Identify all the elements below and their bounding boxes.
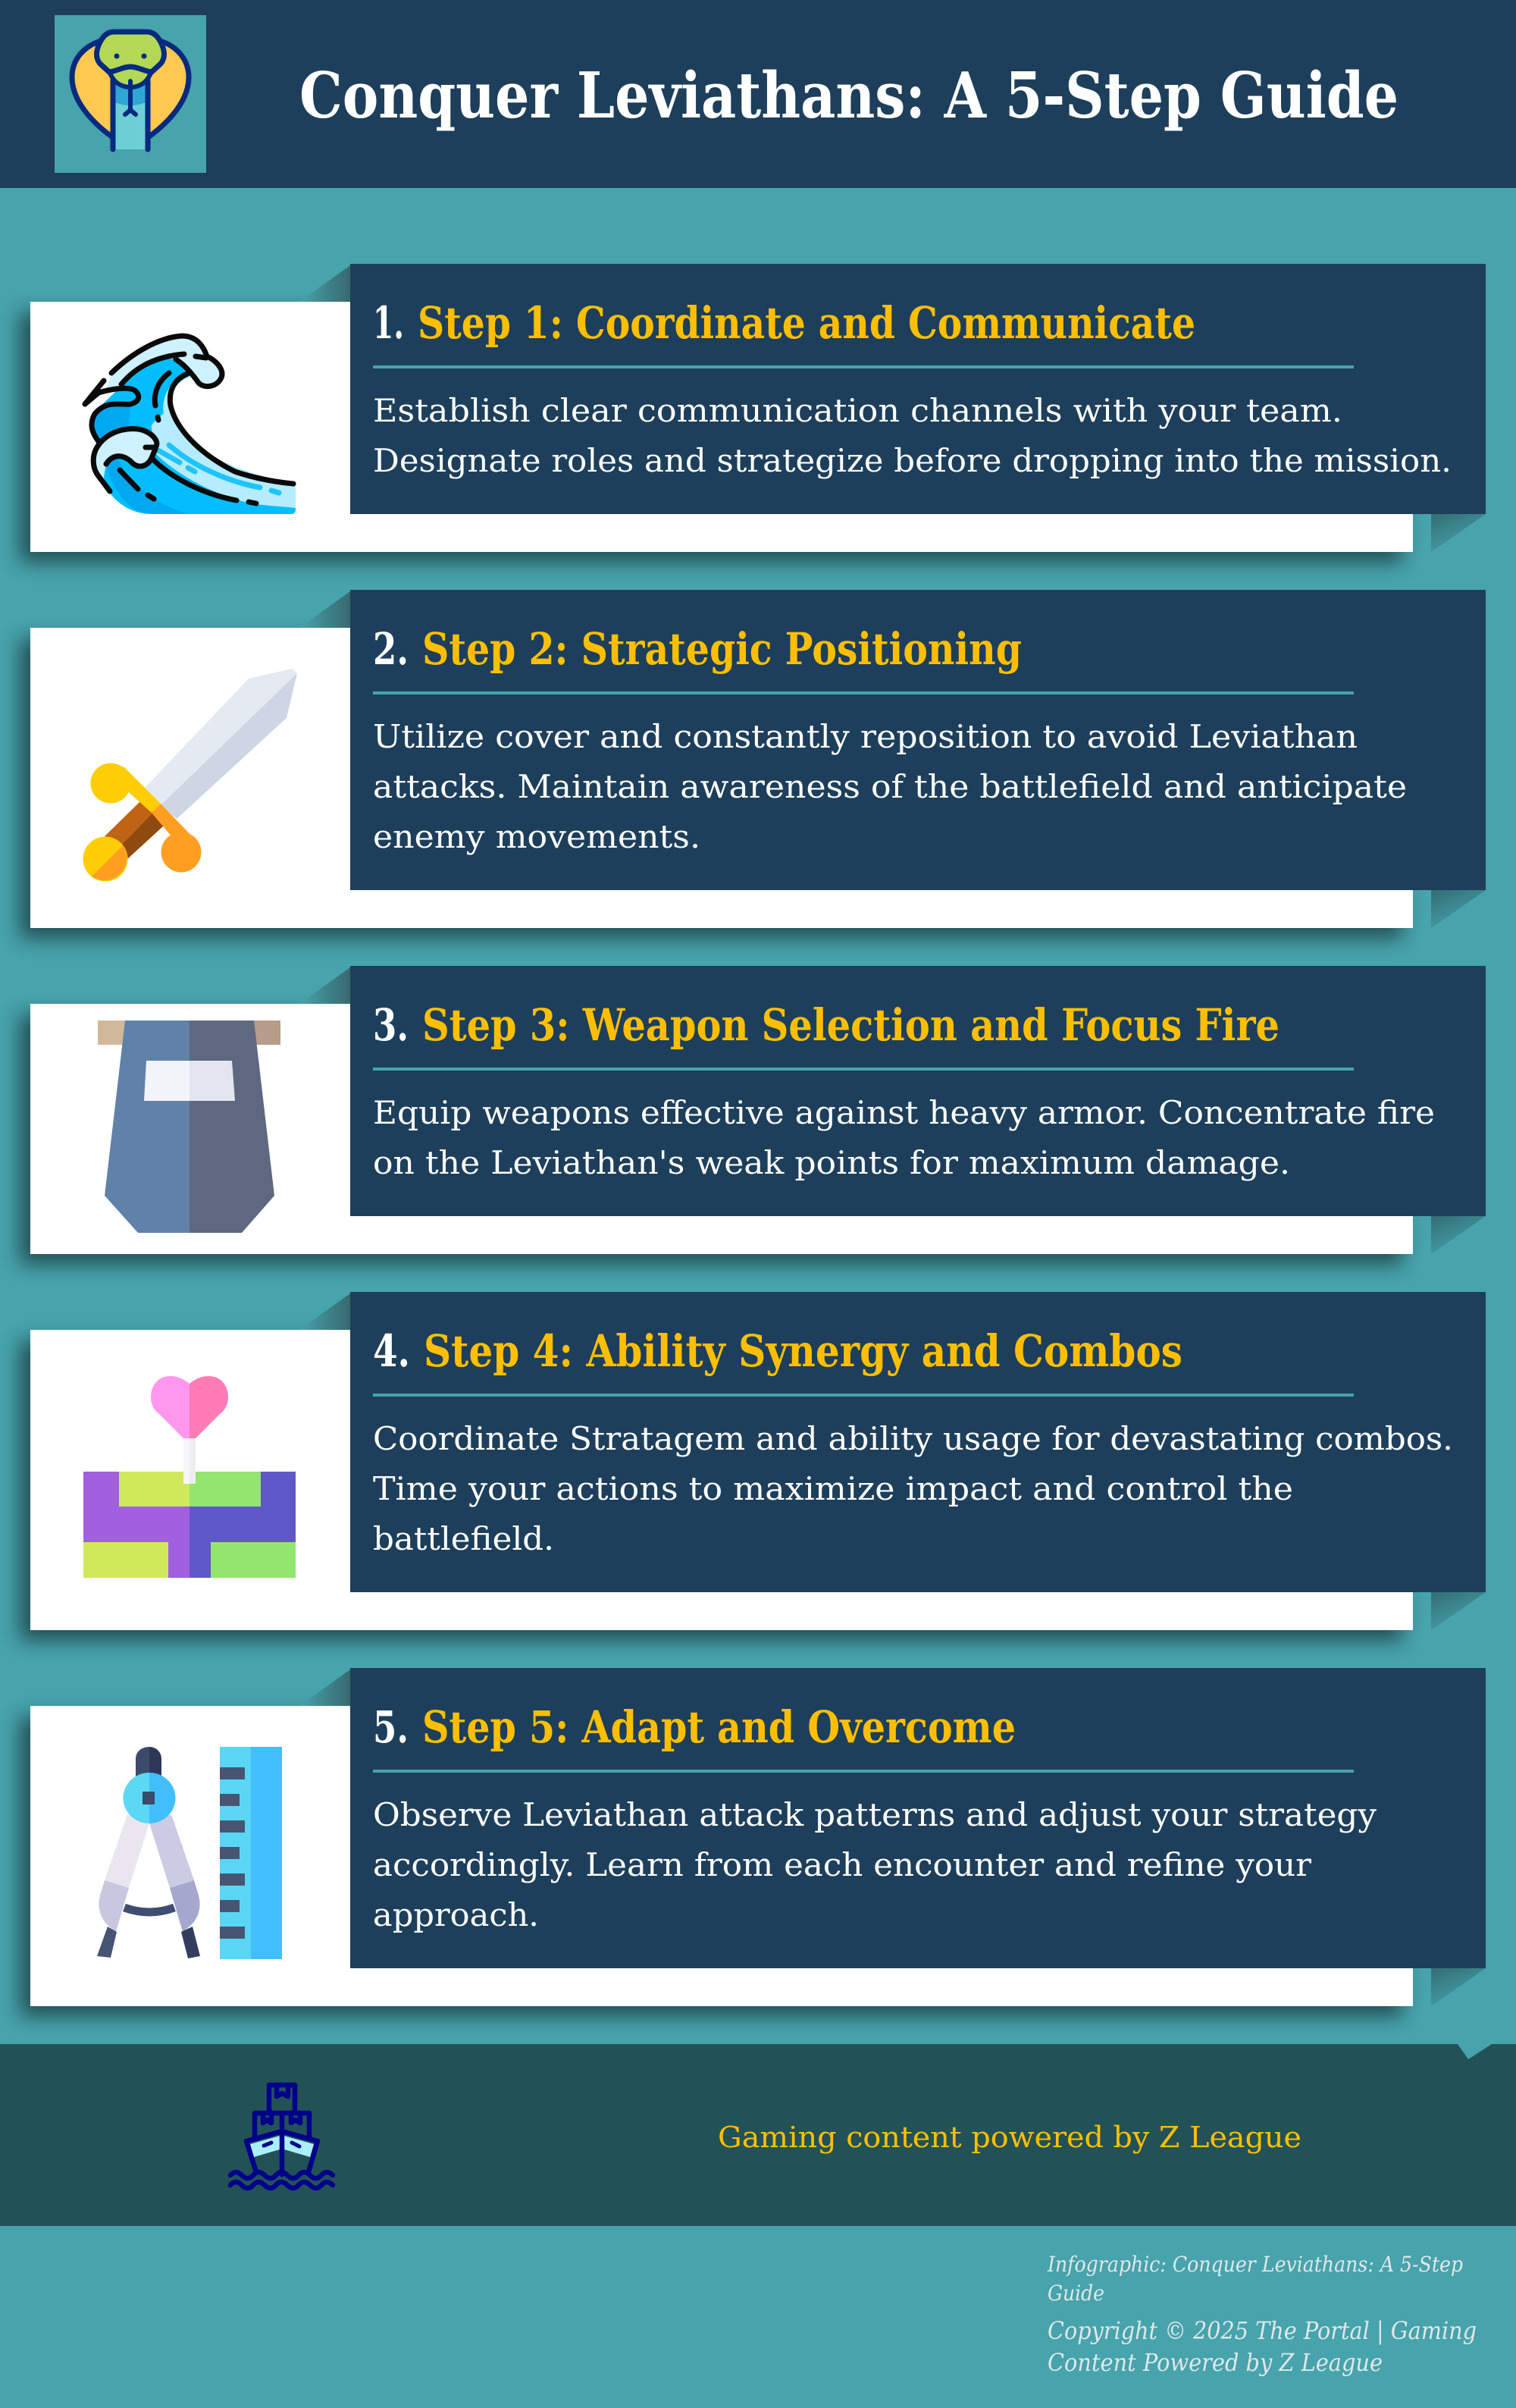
text: step 5 body: [373, 1796, 1377, 1933]
heading: step 4: 4.: [373, 1325, 410, 1377]
text: step 2 body: [373, 718, 1407, 855]
heading: step 4: Step 4: Ability Synergy and Combos: [424, 1325, 1182, 1377]
text: step 2 body: Utilize cover and constantly reposition to avoid Leviathan: [373, 718, 1358, 755]
text: step 3 body: Equip weapons effective against heavy armor. Concentrate fire: [373, 1094, 1435, 1131]
text: step 2 body: attacks. Maintain awareness of the battlefield and anticipate: [373, 768, 1407, 805]
panel: step 1: [20, 264, 1486, 563]
text: step 3 body: on the Leviathan's weak points for maximum damage.: [373, 1144, 1290, 1181]
footer text: Gaming content powered by Z League: [718, 2121, 1301, 2154]
text: step 1 body: Establish clear communication channels with your team.: [373, 392, 1342, 429]
text: step 5 body: Observe Leviathan attack patterns and adjust your strategy: [373, 1796, 1377, 1833]
panel: step 3: [20, 966, 1486, 1265]
text: step 3 body: [373, 1094, 1435, 1181]
icon: sword: [83, 669, 297, 881]
icon: compass and ruler: [97, 1747, 282, 1959]
credits text: Guide: [1048, 2281, 1104, 2306]
text: step 1 body: Designate roles and strategize before dropping into the mission.: [373, 442, 1452, 479]
credits text: Infographic: Conquer Leviathans: A 5-Step: [1047, 2252, 1463, 2277]
footer band: [0, 2044, 1516, 2226]
credits text: Content Powered by Z League: [1048, 2348, 1383, 2377]
icon: wave: [85, 336, 296, 514]
heading: step 2: 2.: [373, 623, 409, 675]
heading: step 3: 3.: [373, 999, 409, 1051]
panel: step 4: [20, 1292, 1486, 1641]
text: step 4 body: battlefield.: [373, 1520, 554, 1557]
text: step 5 body: accordingly. Learn from each encounter and refine your: [373, 1846, 1312, 1883]
heading: step 1: Step 1: Coordinate and Communicate: [418, 297, 1195, 349]
text: step 4 body: [373, 1420, 1453, 1557]
heading: step 5: 5.: [373, 1701, 409, 1753]
heading: step 5: Step 5: Adapt and Overcome: [422, 1701, 1016, 1753]
credits text: Copyright © 2025 The Portal | Gaming: [1048, 2316, 1477, 2345]
icon: banner: [98, 1021, 280, 1233]
credits text: [1047, 2252, 1477, 2377]
header banner: [0, 0, 1516, 188]
heading: step 2: Step 2: Strategic Positioning: [422, 623, 1022, 675]
text: step 1 body: [373, 392, 1452, 479]
icon: cobra logo: [55, 15, 206, 173]
icon: ship: [230, 2085, 333, 2188]
text: step 4 body: Time your actions to maximize impact and control the: [373, 1470, 1293, 1507]
text: step 4 body: Coordinate Stratagem and ability usage for devastating combos.: [373, 1420, 1453, 1457]
panel: step 5: [20, 1668, 1486, 2017]
text: step 5 body: approach.: [373, 1896, 539, 1933]
heading: step 3: Step 3: Weapon Selection and Focus Fire: [422, 999, 1280, 1051]
panel: step 2: [20, 590, 1486, 939]
heading: step 1: 1.: [373, 297, 404, 349]
icon: heart and blocks: [83, 1376, 296, 1578]
text: step 2 body: enemy movements.: [373, 818, 700, 855]
